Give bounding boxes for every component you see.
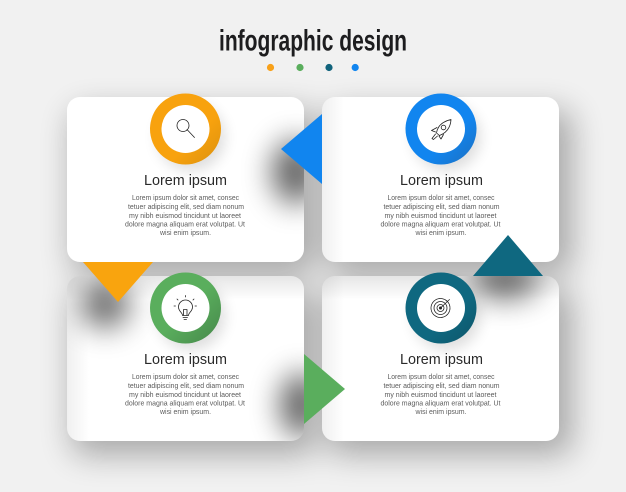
heading: Lorem ipsum	[144, 172, 227, 189]
body text: my nibh euismod tincidunt ut laoreet	[129, 390, 242, 399]
body text: wisi enim ipsum.	[159, 407, 211, 416]
icon ring: target	[406, 272, 480, 350]
panel: top right card	[322, 94, 559, 262]
heading: Lorem ipsum	[400, 172, 483, 189]
heading: Lorem ipsum	[400, 351, 483, 368]
body text: tetuer adipiscing elit, sed diam nonum	[128, 381, 244, 390]
body text: wisi enim ipsum.	[415, 228, 466, 237]
heading: Lorem ipsum	[144, 351, 227, 368]
body text: dolore magna aliquam erat volutpat. Ut	[125, 220, 246, 228]
body text: my nibh euismod tincidunt ut laoreet	[129, 211, 242, 220]
body text: wisi enim ipsum.	[415, 407, 466, 416]
title: infographic design	[219, 24, 407, 58]
panel: bottom left card	[67, 272, 324, 441]
body text: my nibh euismod tincidunt ut laoreet	[384, 211, 497, 220]
body text: tetuer adipiscing elit, sed diam nonum	[384, 202, 500, 211]
body text: tetuer adipiscing elit, sed diam nonum	[384, 381, 500, 390]
arrow: blue triangle	[281, 114, 322, 184]
body text: tetuer adipiscing elit, sed diam nonum	[128, 202, 244, 211]
card shadows	[72, 110, 572, 455]
arrow: orange triangle	[83, 262, 153, 302]
body text: dolore magna aliquam erat volutpat. Ut	[380, 398, 501, 408]
body text	[125, 372, 246, 416]
body text	[380, 193, 501, 237]
body text	[125, 193, 246, 237]
body text: my nibh euismod tincidunt ut laoreet	[384, 390, 497, 399]
panel: bottom right card	[322, 262, 559, 441]
body text: dolore magna aliquam erat volutpat. Ut	[380, 220, 501, 228]
body text: Lorem ipsum dolor sit amet, consec	[388, 372, 495, 381]
body text: wisi enim ipsum.	[159, 228, 211, 237]
body text: Lorem ipsum dolor sit amet, consec	[132, 372, 239, 381]
infographic canvas	[54, 29, 590, 474]
body text	[380, 372, 501, 416]
panel: top left card	[67, 94, 320, 262]
icon ring: magnifier	[150, 94, 225, 171]
arrow: green triangle	[304, 354, 345, 424]
legend dots	[267, 64, 359, 71]
arrow: teal triangle	[473, 235, 543, 276]
body text: Lorem ipsum dolor sit amet, consec	[388, 193, 495, 202]
icon ring: rocket	[406, 94, 480, 171]
body text: dolore magna aliquam erat volutpat. Ut	[125, 398, 246, 408]
icon ring: bulb	[150, 272, 225, 350]
body text: Lorem ipsum dolor sit amet, consec	[132, 193, 239, 202]
